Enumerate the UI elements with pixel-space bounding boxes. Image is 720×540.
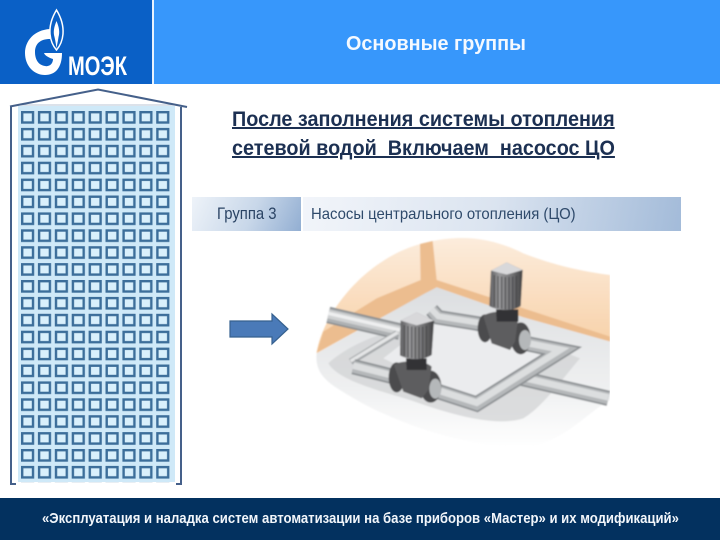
heading: instruction text: После заполнения системы отопления: [232, 108, 615, 131]
pipes: [328, 309, 608, 404]
footer band: [0, 498, 720, 540]
wall: [317, 238, 610, 353]
building illustration: [10, 88, 188, 485]
arrow: [229, 312, 289, 346]
floor: [316, 287, 610, 448]
logo panel: [0, 0, 154, 84]
far valve: [478, 262, 531, 354]
footer text: «Эксплуатация и наладка систем автоматизации на базе приборов «Мастер» и их модификаций»: [42, 510, 679, 527]
header band: [0, 0, 720, 84]
near valve: [389, 312, 441, 403]
group label cell: [192, 197, 301, 231]
group description cell: Насосы центрального отопления (ЦО): [311, 206, 576, 223]
heading: instruction text: сетевой водой Включаем насосос ЦО: [232, 137, 615, 160]
pump illustration: [316, 238, 610, 422]
icon: Gazprom MOEK logo: [25, 8, 127, 78]
heading: instruction text: [232, 108, 615, 160]
group row: [192, 197, 681, 231]
floor shadow: [328, 320, 580, 421]
group label cell: Группа 3: [217, 204, 277, 223]
title: Основные группы: [346, 33, 526, 55]
group description cell: [303, 197, 681, 231]
